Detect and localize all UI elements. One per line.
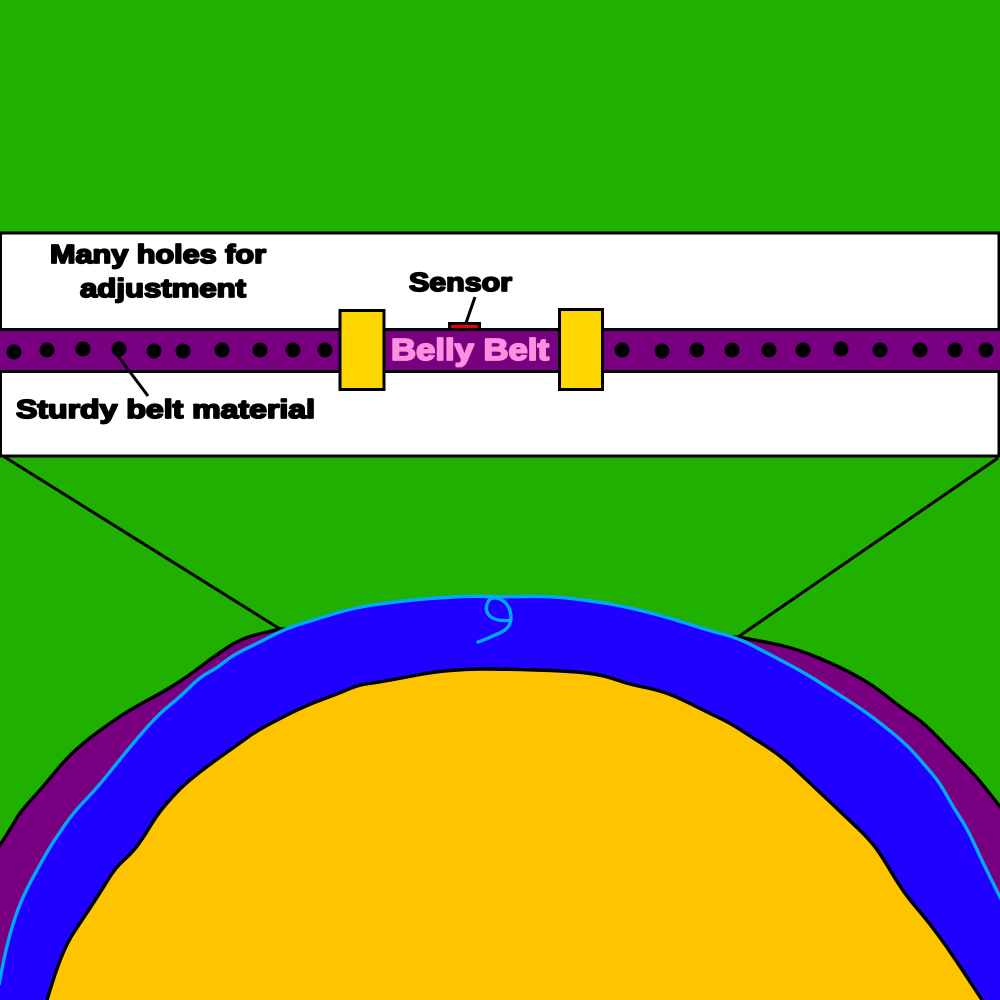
label: material: Sturdy belt material — [16, 394, 315, 424]
label: holes line 1: Many holes for — [50, 239, 266, 269]
belly: yellow — [43, 669, 990, 1000]
belt front outline — [0, 596, 1000, 985]
label: sensor: Sensor — [409, 267, 512, 297]
zoom line left — [3, 456, 280, 629]
zoom line right — [738, 458, 998, 637]
belt strap — [0, 330, 1000, 372]
belt front: blue — [0, 596, 1000, 1000]
sensor — [450, 324, 480, 332]
belt holes left — [6, 342, 332, 360]
squiggle on belt — [478, 598, 511, 642]
belt name label: Belly Belt — [391, 332, 549, 367]
belt back: purple — [0, 629, 1000, 1000]
left buckle — [340, 310, 384, 390]
belt holes right — [614, 342, 994, 358]
panel: belt close-up — [0, 233, 1000, 456]
panel background — [0, 233, 999, 456]
belly illustration — [0, 596, 1000, 1000]
sensor leader line — [466, 297, 475, 323]
label: holes line 2: adjustment — [80, 273, 246, 303]
material leader line — [115, 352, 148, 396]
right buckle — [560, 310, 602, 390]
